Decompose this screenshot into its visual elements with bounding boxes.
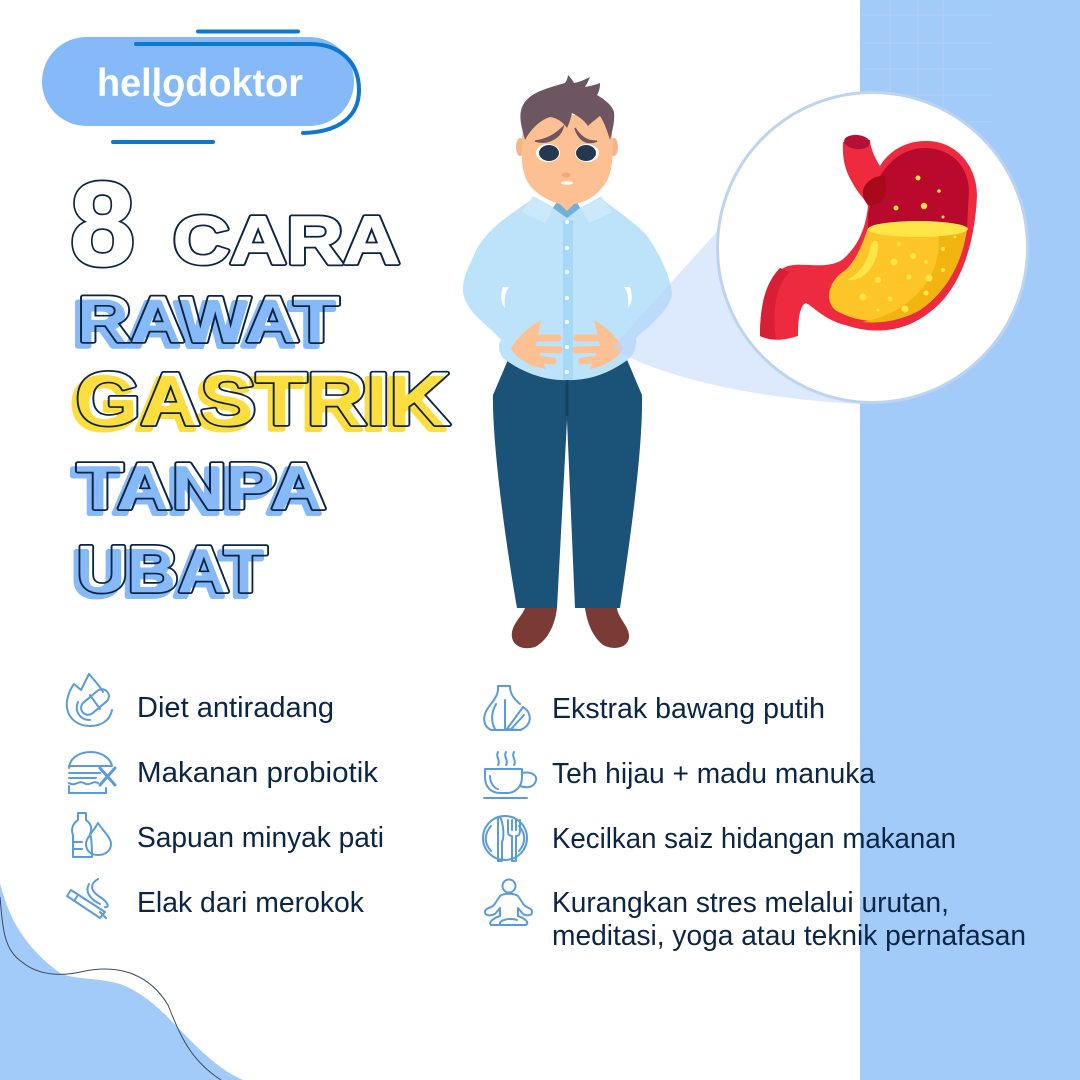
item: kurangkan stres (485, 880, 1026, 952)
item: kurangkan stres: Kurangkan stres melalui urutan, (552, 887, 949, 919)
title outlines (70, 158, 450, 606)
item: kecilkan saiz hidangan makanan (483, 816, 956, 861)
icon: meditating figure (485, 880, 532, 925)
item: makanan probiotik (69, 752, 378, 793)
item: diet antiradang: Diet antiradang (137, 692, 334, 724)
icon: cup of tea (484, 752, 536, 798)
logo: hellodoktor pill: hellodoktor (97, 62, 303, 105)
title outlines: CARA (173, 202, 400, 278)
item: kurangkan stres: meditasi, yoga atau teknik pernafasan (552, 920, 1026, 952)
title outlines: TANPA (77, 450, 326, 522)
trousers (493, 355, 642, 608)
callout cone (612, 226, 860, 404)
title shadow fills: GASTRIK (71, 362, 445, 446)
item: makanan probiotik: Makanan probiotik (137, 757, 378, 789)
item: ekstrak bawang putih: Ekstrak bawang putih (552, 693, 825, 725)
item: elak dari merokok (67, 879, 364, 919)
hands (511, 320, 623, 369)
list: right column (483, 686, 1026, 952)
item: diet antiradang (67, 674, 334, 726)
icon: plate, knife and fork (483, 816, 527, 861)
callout circle (718, 92, 1028, 402)
item: kecilkan saiz hidangan makanan: Kecilkan saiz hidangan makanan (552, 823, 956, 855)
shirt (463, 196, 672, 380)
title shadow fills: UBAT (72, 538, 262, 610)
item: ekstrak bawang putih (484, 686, 825, 730)
head (516, 75, 618, 211)
title outlines: UBAT (77, 532, 267, 606)
icon: flame and pill (67, 674, 112, 726)
title: 8 cara rawat gastrik tanpa ubat (70, 158, 450, 610)
illustration: man holding stomach (463, 75, 672, 648)
icon: oil bottle and drop (72, 813, 111, 857)
logo: hellodoktor pill (42, 32, 359, 142)
title shadow fills: TANPA (72, 454, 321, 528)
item: sapuan minyak pati (72, 813, 384, 857)
bottom-left wave decoration (0, 883, 243, 1080)
item: teh hijau + madu manuka: Teh hijau + madu manuka (552, 758, 876, 790)
title shadow fills (71, 288, 445, 610)
icon: cigarette and smoke (67, 879, 108, 918)
title outlines: RAWAT (78, 284, 339, 356)
panel: right blue column (860, 0, 1080, 1080)
item: sapuan minyak pati: Sapuan minyak pati (137, 822, 384, 854)
title outlines: 8 (70, 158, 135, 291)
shoes (512, 608, 629, 648)
title shadow fills: RAWAT (73, 288, 334, 360)
list: left column (67, 674, 384, 919)
title outlines: GASTRIK (76, 358, 450, 440)
icon: garlic (484, 686, 530, 730)
icon: burger with cross (69, 752, 115, 793)
item: teh hijau + madu manuka (484, 752, 876, 798)
illustration: stomach with acid (760, 134, 977, 340)
item: elak dari merokok: Elak dari merokok (137, 887, 364, 919)
